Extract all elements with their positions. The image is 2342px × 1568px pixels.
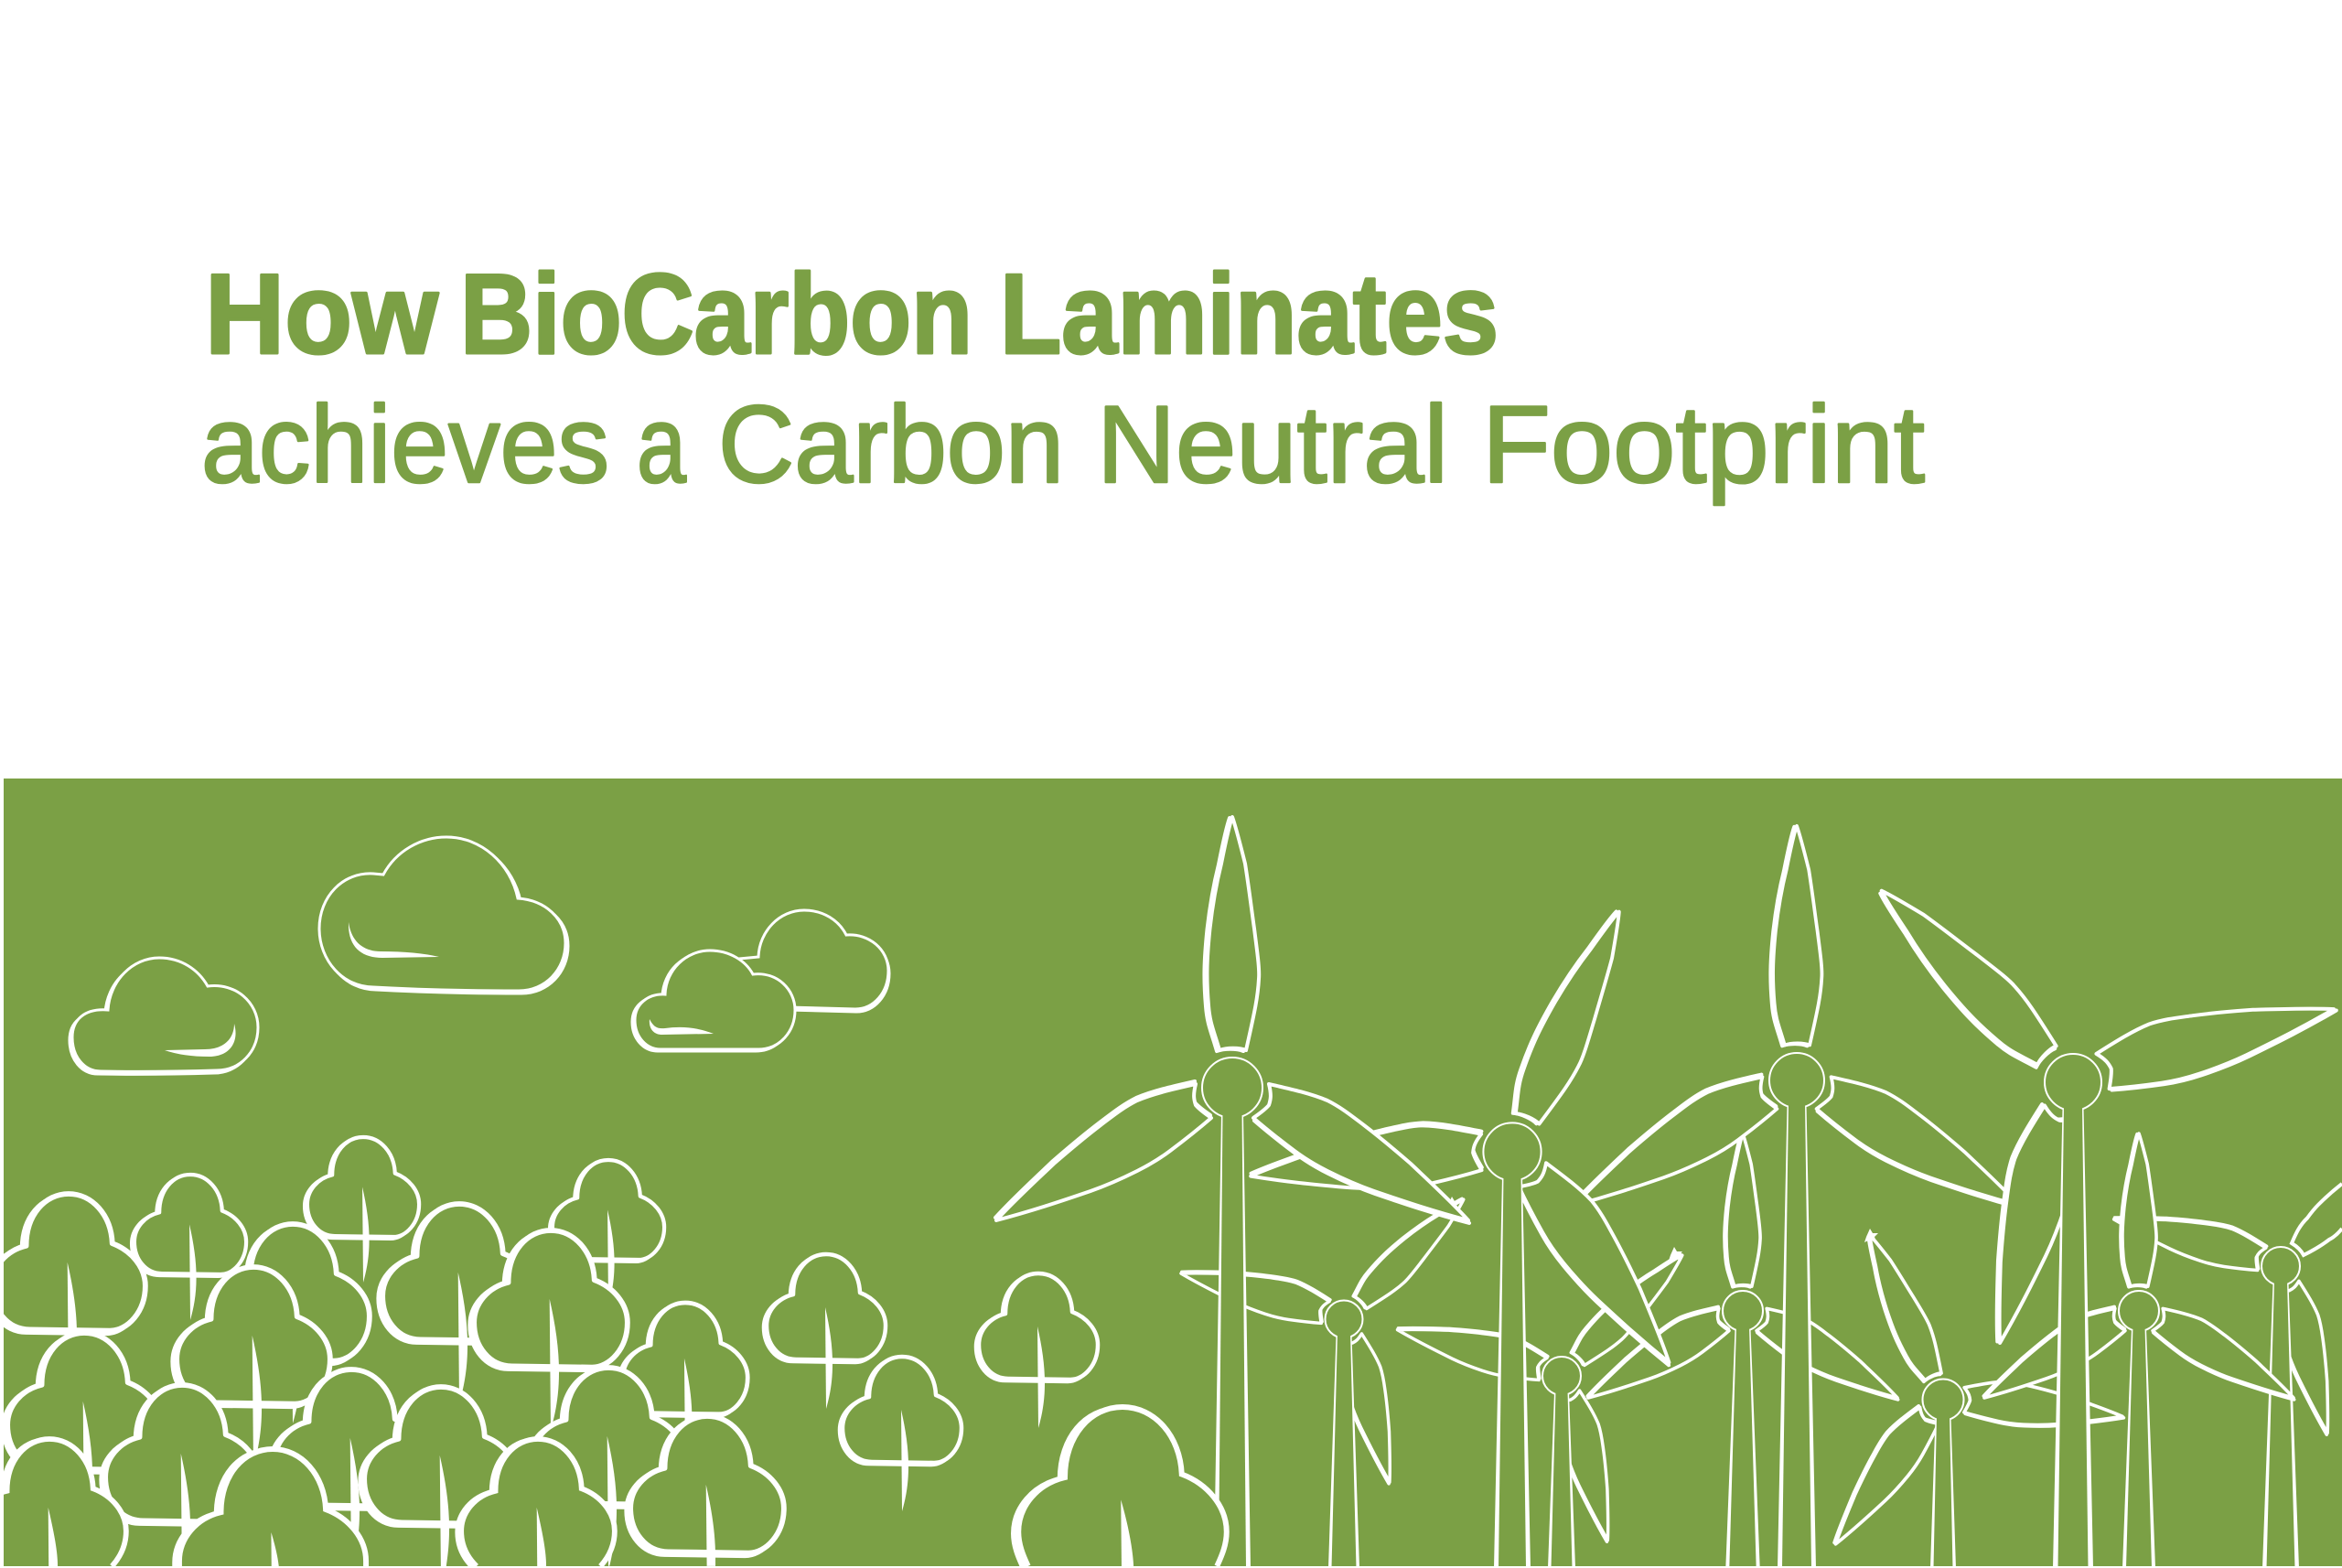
wind turbines	[994, 815, 2342, 1566]
clouds	[70, 837, 889, 1074]
cloud: double right	[632, 910, 889, 1051]
panel: green landscape banner	[4, 779, 2342, 1566]
cloud: large centre	[319, 837, 568, 993]
title line 2: regular: Footprint	[1482, 383, 1925, 506]
turbine: small, behind centre-right	[1587, 1133, 1898, 1568]
tree	[245, 1221, 372, 1423]
tree	[305, 1137, 419, 1283]
turbine: small left	[1179, 1095, 1568, 1568]
forest of trees	[0, 1137, 1227, 1568]
turbine: small right	[1983, 1133, 2294, 1568]
turbine: large centre, tilted	[1249, 819, 1829, 1568]
title line 2: regular: Neutral	[1097, 383, 1448, 506]
title line 2: regular: a	[637, 383, 686, 506]
tree	[0, 1439, 126, 1567]
tree	[764, 1254, 886, 1409]
tree	[99, 1382, 252, 1533]
blade tip star	[1864, 1229, 1878, 1242]
tree	[4, 1336, 152, 1475]
tree	[976, 1273, 1098, 1428]
tree	[528, 1368, 685, 1566]
turbine: large right, tilted	[1878, 889, 2338, 1566]
tree	[627, 1416, 784, 1566]
tree	[620, 1301, 750, 1420]
tree	[173, 1267, 330, 1466]
title	[201, 252, 1925, 506]
tree: large, foreground	[1014, 1407, 1227, 1568]
turbine: small, behind centre	[1396, 1150, 1788, 1568]
title line 2: regular: Carbon	[718, 383, 1064, 506]
tree	[457, 1439, 615, 1567]
title line 1: bold: How	[205, 252, 439, 378]
tree	[550, 1160, 664, 1305]
turbine: large centre-right	[1574, 826, 2019, 1568]
tree	[470, 1230, 628, 1430]
tree	[132, 1175, 246, 1320]
title line 2: regular: achieves	[201, 383, 609, 506]
turbine: small, tilted left	[1726, 1171, 2123, 1568]
blade tip star	[1669, 1247, 1682, 1261]
tree	[376, 1201, 510, 1391]
title line 1: bold	[205, 252, 1499, 378]
title line 2: regular	[201, 383, 1925, 506]
tree	[840, 1357, 962, 1511]
tree	[4, 1191, 148, 1336]
illustration: landscape artwork	[4, 815, 2342, 1566]
tree	[360, 1387, 518, 1566]
cloud: left	[70, 958, 258, 1074]
title line 1: bold: Laminates	[1000, 252, 1499, 378]
turbine: far right small	[2113, 1156, 2342, 1568]
turbine: large left	[995, 817, 1469, 1568]
blade tip star	[1451, 1197, 1456, 1206]
tree	[175, 1449, 366, 1568]
title line 1: bold: BioCarbon	[460, 252, 972, 378]
tree	[273, 1367, 397, 1531]
